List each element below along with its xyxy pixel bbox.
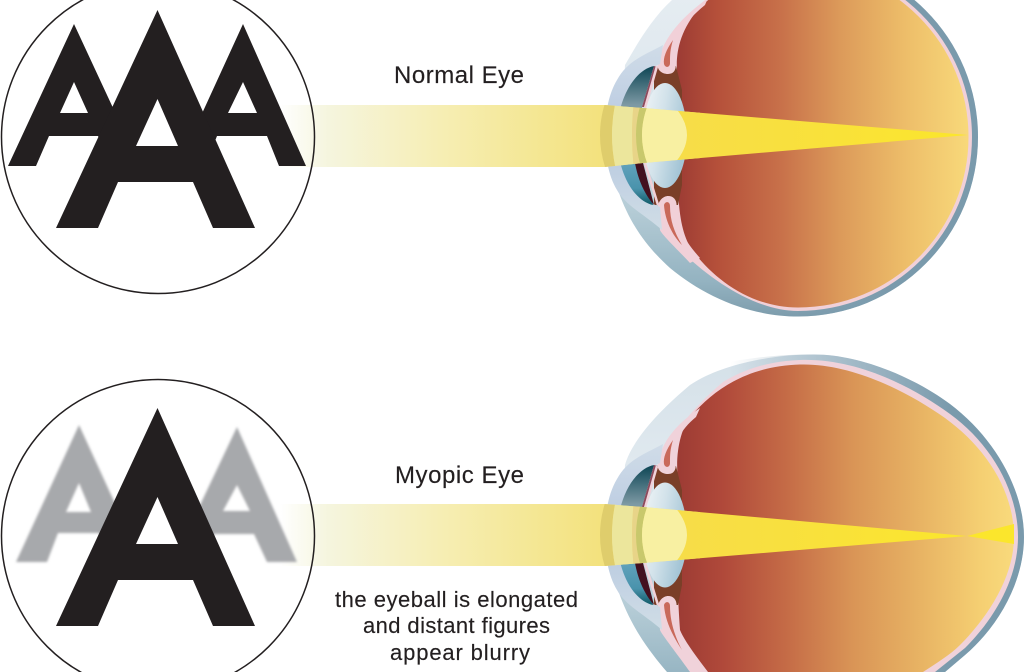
thin pink band (645, 66, 658, 205)
light beam (292, 504, 966, 566)
panel: myopic vision circle (2, 380, 314, 672)
caption: and distant figures (363, 613, 550, 638)
beam past focal point (967, 524, 1014, 544)
heading: myopic eye: Myopic Eye (395, 462, 524, 489)
sharp letter A centre (56, 408, 255, 626)
caption: the eyeball is elongated (335, 587, 578, 612)
sclera (618, 0, 978, 316)
ciliary body upper (658, 0, 708, 74)
caption (335, 587, 578, 665)
illustration: myopic eye (280, 354, 1024, 672)
letter A left (8, 24, 140, 166)
lens (643, 83, 687, 188)
iris (642, 66, 658, 107)
thin pink band (645, 466, 658, 605)
letter A centre (56, 10, 255, 228)
lens (643, 482, 687, 588)
ciliary body lower (658, 596, 705, 672)
light beam (292, 105, 968, 167)
sclera (618, 354, 1024, 672)
ciliary muscle area (654, 466, 682, 605)
panel: normal vision circle (2, 0, 314, 294)
cornea (605, 444, 663, 630)
cornea (605, 45, 663, 230)
caption: appear blurry (390, 640, 530, 665)
ciliary muscle area (654, 66, 682, 205)
pink choroid layer (658, 0, 972, 311)
heading: normal eye: Normal Eye (394, 62, 524, 89)
illustration: normal eye (280, 0, 978, 316)
ciliary body upper (658, 408, 700, 474)
anterior chamber (617, 66, 654, 205)
pink choroid layer (658, 360, 1018, 672)
blurred letter A right (173, 427, 297, 562)
ciliary body lower (658, 196, 700, 263)
blurred letter A left (16, 425, 142, 562)
iris (642, 465, 658, 507)
anterior chamber (617, 465, 654, 605)
vitreous interior (677, 0, 968, 308)
vitreous interior (677, 364, 1014, 672)
letter A right (178, 24, 306, 166)
